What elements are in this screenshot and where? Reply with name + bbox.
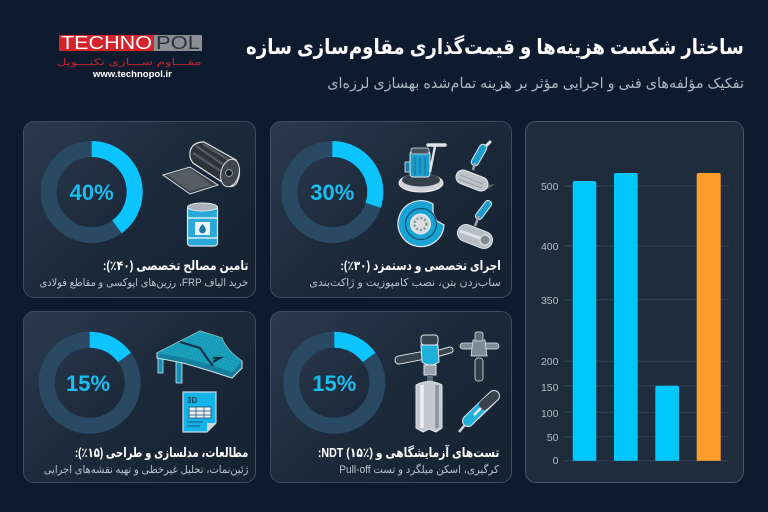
donut chart 15%: 15% bbox=[66, 371, 110, 396]
icon: finite element model bbox=[157, 331, 242, 383]
icon: roller one bbox=[458, 142, 495, 190]
logo bbox=[57, 34, 202, 80]
title: ساختار شکست هزینه‌ها و قیمت‌گذاری مقاوم‌سازی سازه bbox=[246, 36, 744, 59]
icon: pull-off tester handle bbox=[460, 332, 499, 381]
chart grid and axis labels: 500 bbox=[541, 181, 559, 193]
chart grid and axis labels: 200 bbox=[541, 356, 559, 368]
icon: 3D drawing document bbox=[183, 392, 216, 432]
chart grid and axis labels: 150 bbox=[541, 382, 559, 394]
description: studies: ژئین‌نمات، تحلیل غیرخطی و تهیه نقشه‌های اجرایی bbox=[43, 464, 248, 476]
panel: lab tests and NDT 15% bbox=[270, 311, 512, 483]
bars bbox=[573, 173, 721, 461]
icon: fiber roll bbox=[163, 142, 242, 194]
donut chart 30%: 30% bbox=[310, 180, 354, 205]
description: tests: کرگیری، اسکن میلگرد و تست Pull-off bbox=[339, 464, 499, 476]
description: materials: خرید الیاف FRP، رزین‌های اپوکسی و مقاطع فولادی bbox=[40, 277, 248, 289]
icon: resin drum bbox=[188, 203, 218, 246]
description: execution: ساب‌زدن بتن، نصب کامپوزیت و ژاکت‌بندی bbox=[309, 277, 501, 289]
donut chart 40% bbox=[49, 149, 135, 235]
icon: 3D drawing document: 3D bbox=[187, 396, 197, 405]
donut chart 15%: 15% bbox=[312, 371, 356, 396]
icon: diamond cup wheel bbox=[398, 201, 444, 247]
chart grid and axis labels: 50 bbox=[547, 432, 559, 444]
donut chart 40%: 40% bbox=[70, 180, 114, 205]
icon: roller two bbox=[460, 204, 490, 245]
logo tagline: مقـــاوم ســـازی تکنـــوپل bbox=[57, 57, 202, 67]
icon: core drill bbox=[399, 335, 450, 432]
chart grid and axis labels: 100 bbox=[541, 408, 559, 420]
logo url: www.technopol.ir bbox=[93, 69, 172, 80]
chart grid and axis labels bbox=[541, 181, 729, 467]
panel: specialized execution 30% bbox=[270, 121, 512, 298]
chart grid and axis labels: 400 bbox=[541, 241, 559, 253]
icon: floor grinder bbox=[399, 145, 445, 192]
heading: materials: تامین مصالح تخصصی (۴۰٪): bbox=[102, 258, 248, 273]
chart grid and axis labels: 0 bbox=[553, 455, 559, 467]
heading: studies: مطالعات، مدلسازی و طراحی (۱۵٪): bbox=[75, 445, 248, 460]
donut chart 15% bbox=[291, 340, 377, 426]
donut chart 30% bbox=[289, 149, 375, 235]
heading: execution: اجرای تخصصی و دستمزد (۳۰٪): bbox=[341, 258, 501, 273]
icon: rebar scanner pen bbox=[459, 396, 494, 432]
heading: tests: تست‌های آزمایشگاهی و NDT (۱۵٪): bbox=[318, 445, 499, 460]
chart grid and axis labels: 350 bbox=[541, 295, 559, 307]
donut chart 15% bbox=[47, 340, 133, 426]
panel: bar chart bbox=[525, 121, 744, 483]
logo wordmark bbox=[59, 34, 202, 52]
panel: studies and modeling 15% bbox=[23, 311, 256, 483]
subtitle: تفکیک مؤلفه‌های فنی و اجرایی مؤثر بر هزینه تمام‌شده بهسازی لرزه‌ای bbox=[327, 76, 744, 92]
panel: specialized materials 40% bbox=[23, 121, 256, 298]
